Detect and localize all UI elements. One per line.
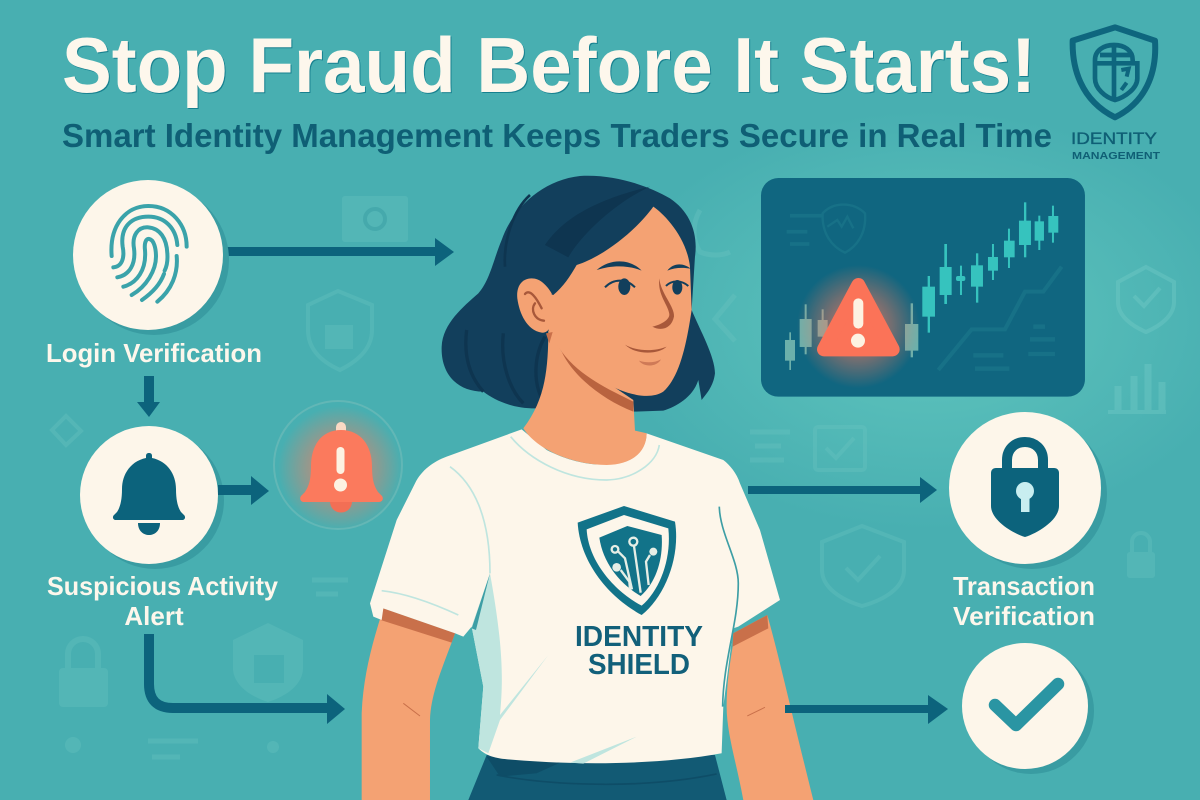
pants xyxy=(468,755,727,800)
icon: alert bell with glow xyxy=(274,401,402,530)
hair xyxy=(442,176,715,412)
warning triangle xyxy=(797,265,920,388)
label: transaction verification: Transaction xyxy=(953,571,1095,601)
shirt text: SHIELD xyxy=(588,649,690,681)
arrow: bell to alert xyxy=(218,476,269,505)
eyebrows xyxy=(597,261,691,271)
torso and arms xyxy=(362,429,813,800)
label: suspicious activity alert: Suspicious Activity xyxy=(47,571,279,601)
icon: padlock xyxy=(949,412,1107,569)
icon: fingerprint xyxy=(73,180,229,335)
nose xyxy=(652,278,674,329)
neck shadow xyxy=(562,352,633,412)
icon: bell xyxy=(80,426,224,569)
face xyxy=(548,207,692,396)
shirt seams xyxy=(382,437,659,615)
hair and head xyxy=(442,176,715,465)
faded background icons xyxy=(52,196,1174,757)
arrow: person to lock xyxy=(748,477,937,503)
subtitle: Smart Identity Management Keeps Traders Secure in Real Time xyxy=(62,118,1052,155)
icon: check mark xyxy=(962,643,1094,774)
label: suspicious activity alert: Alert xyxy=(124,601,184,631)
person xyxy=(362,176,813,800)
candlesticks xyxy=(785,202,1058,370)
eyes xyxy=(605,281,688,287)
arrow: login to person xyxy=(224,238,454,266)
ear xyxy=(517,278,552,333)
neck xyxy=(523,330,647,465)
mouth xyxy=(625,345,667,353)
label: login verification: Login Verification xyxy=(46,338,262,368)
shirt xyxy=(370,429,780,763)
shirt text xyxy=(575,621,703,681)
arrow: login down to alert xyxy=(137,376,160,417)
right arm xyxy=(727,615,813,800)
shirt shadow xyxy=(472,573,548,753)
panel: trading chart xyxy=(761,178,1085,397)
logo: identity management: IDENTITY xyxy=(1071,129,1157,148)
title: Stop Fraud Before It Starts! xyxy=(62,21,1036,109)
arrow: alert to person bent xyxy=(149,634,345,724)
logo: identity management xyxy=(1071,27,1161,162)
label: transaction verification: Verification xyxy=(953,601,1095,631)
shirt text: IDENTITY xyxy=(575,621,703,653)
left arm xyxy=(362,608,455,800)
shirt logo shield xyxy=(578,506,676,615)
logo: identity management: MANAGEMENT xyxy=(1072,150,1161,162)
arrow: person to check xyxy=(785,695,948,724)
